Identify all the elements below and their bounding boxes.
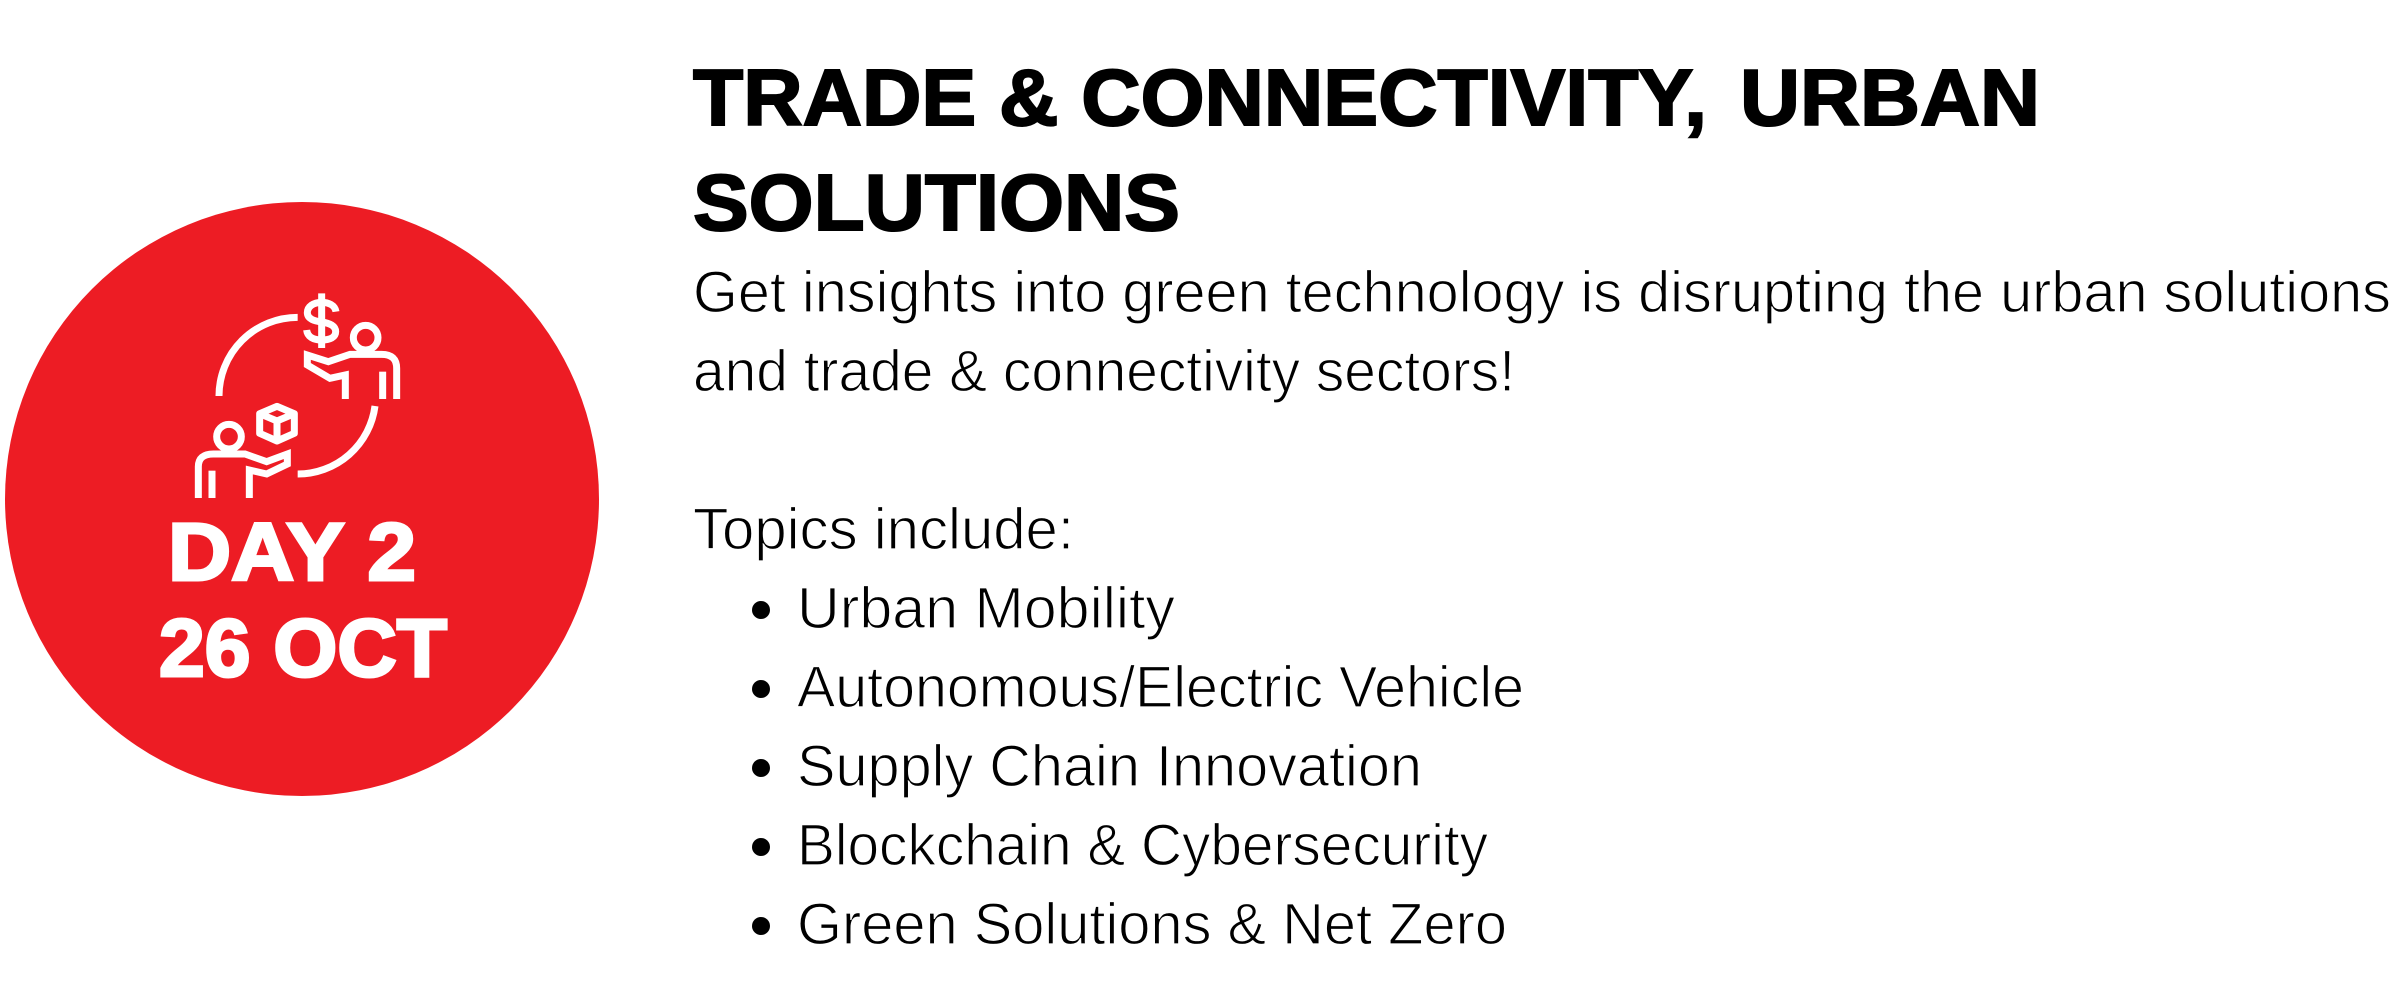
topics list: Urban Mobility	[797, 576, 1175, 641]
topics list	[752, 576, 1524, 957]
topics list: Autonomous/Electric Vehicle	[797, 655, 1524, 720]
heading: URBAN	[1740, 53, 2040, 142]
date label: 26 OCT	[159, 603, 447, 694]
heading	[693, 53, 2040, 247]
topics list: Blockchain & Cybersecurity	[797, 813, 1488, 878]
topics label: Topics include:	[693, 497, 1074, 562]
intro text	[693, 260, 2391, 404]
topics list: Green Solutions & Net Zero	[797, 892, 1507, 957]
panel: day badge	[5, 202, 599, 796]
topics list: Supply Chain Innovation	[797, 734, 1422, 799]
icon: exchange of money and goods	[198, 293, 397, 498]
day label: DAY 2	[168, 507, 416, 598]
intro text: and trade & connectivity sectors!	[693, 339, 1515, 404]
intro text: Get insights into green technology is disrupting the urban solutions	[693, 260, 2391, 325]
red circle	[5, 202, 599, 796]
heading: TRADE & CONNECTIVITY,	[693, 53, 1707, 142]
heading: SOLUTIONS	[693, 158, 1180, 247]
